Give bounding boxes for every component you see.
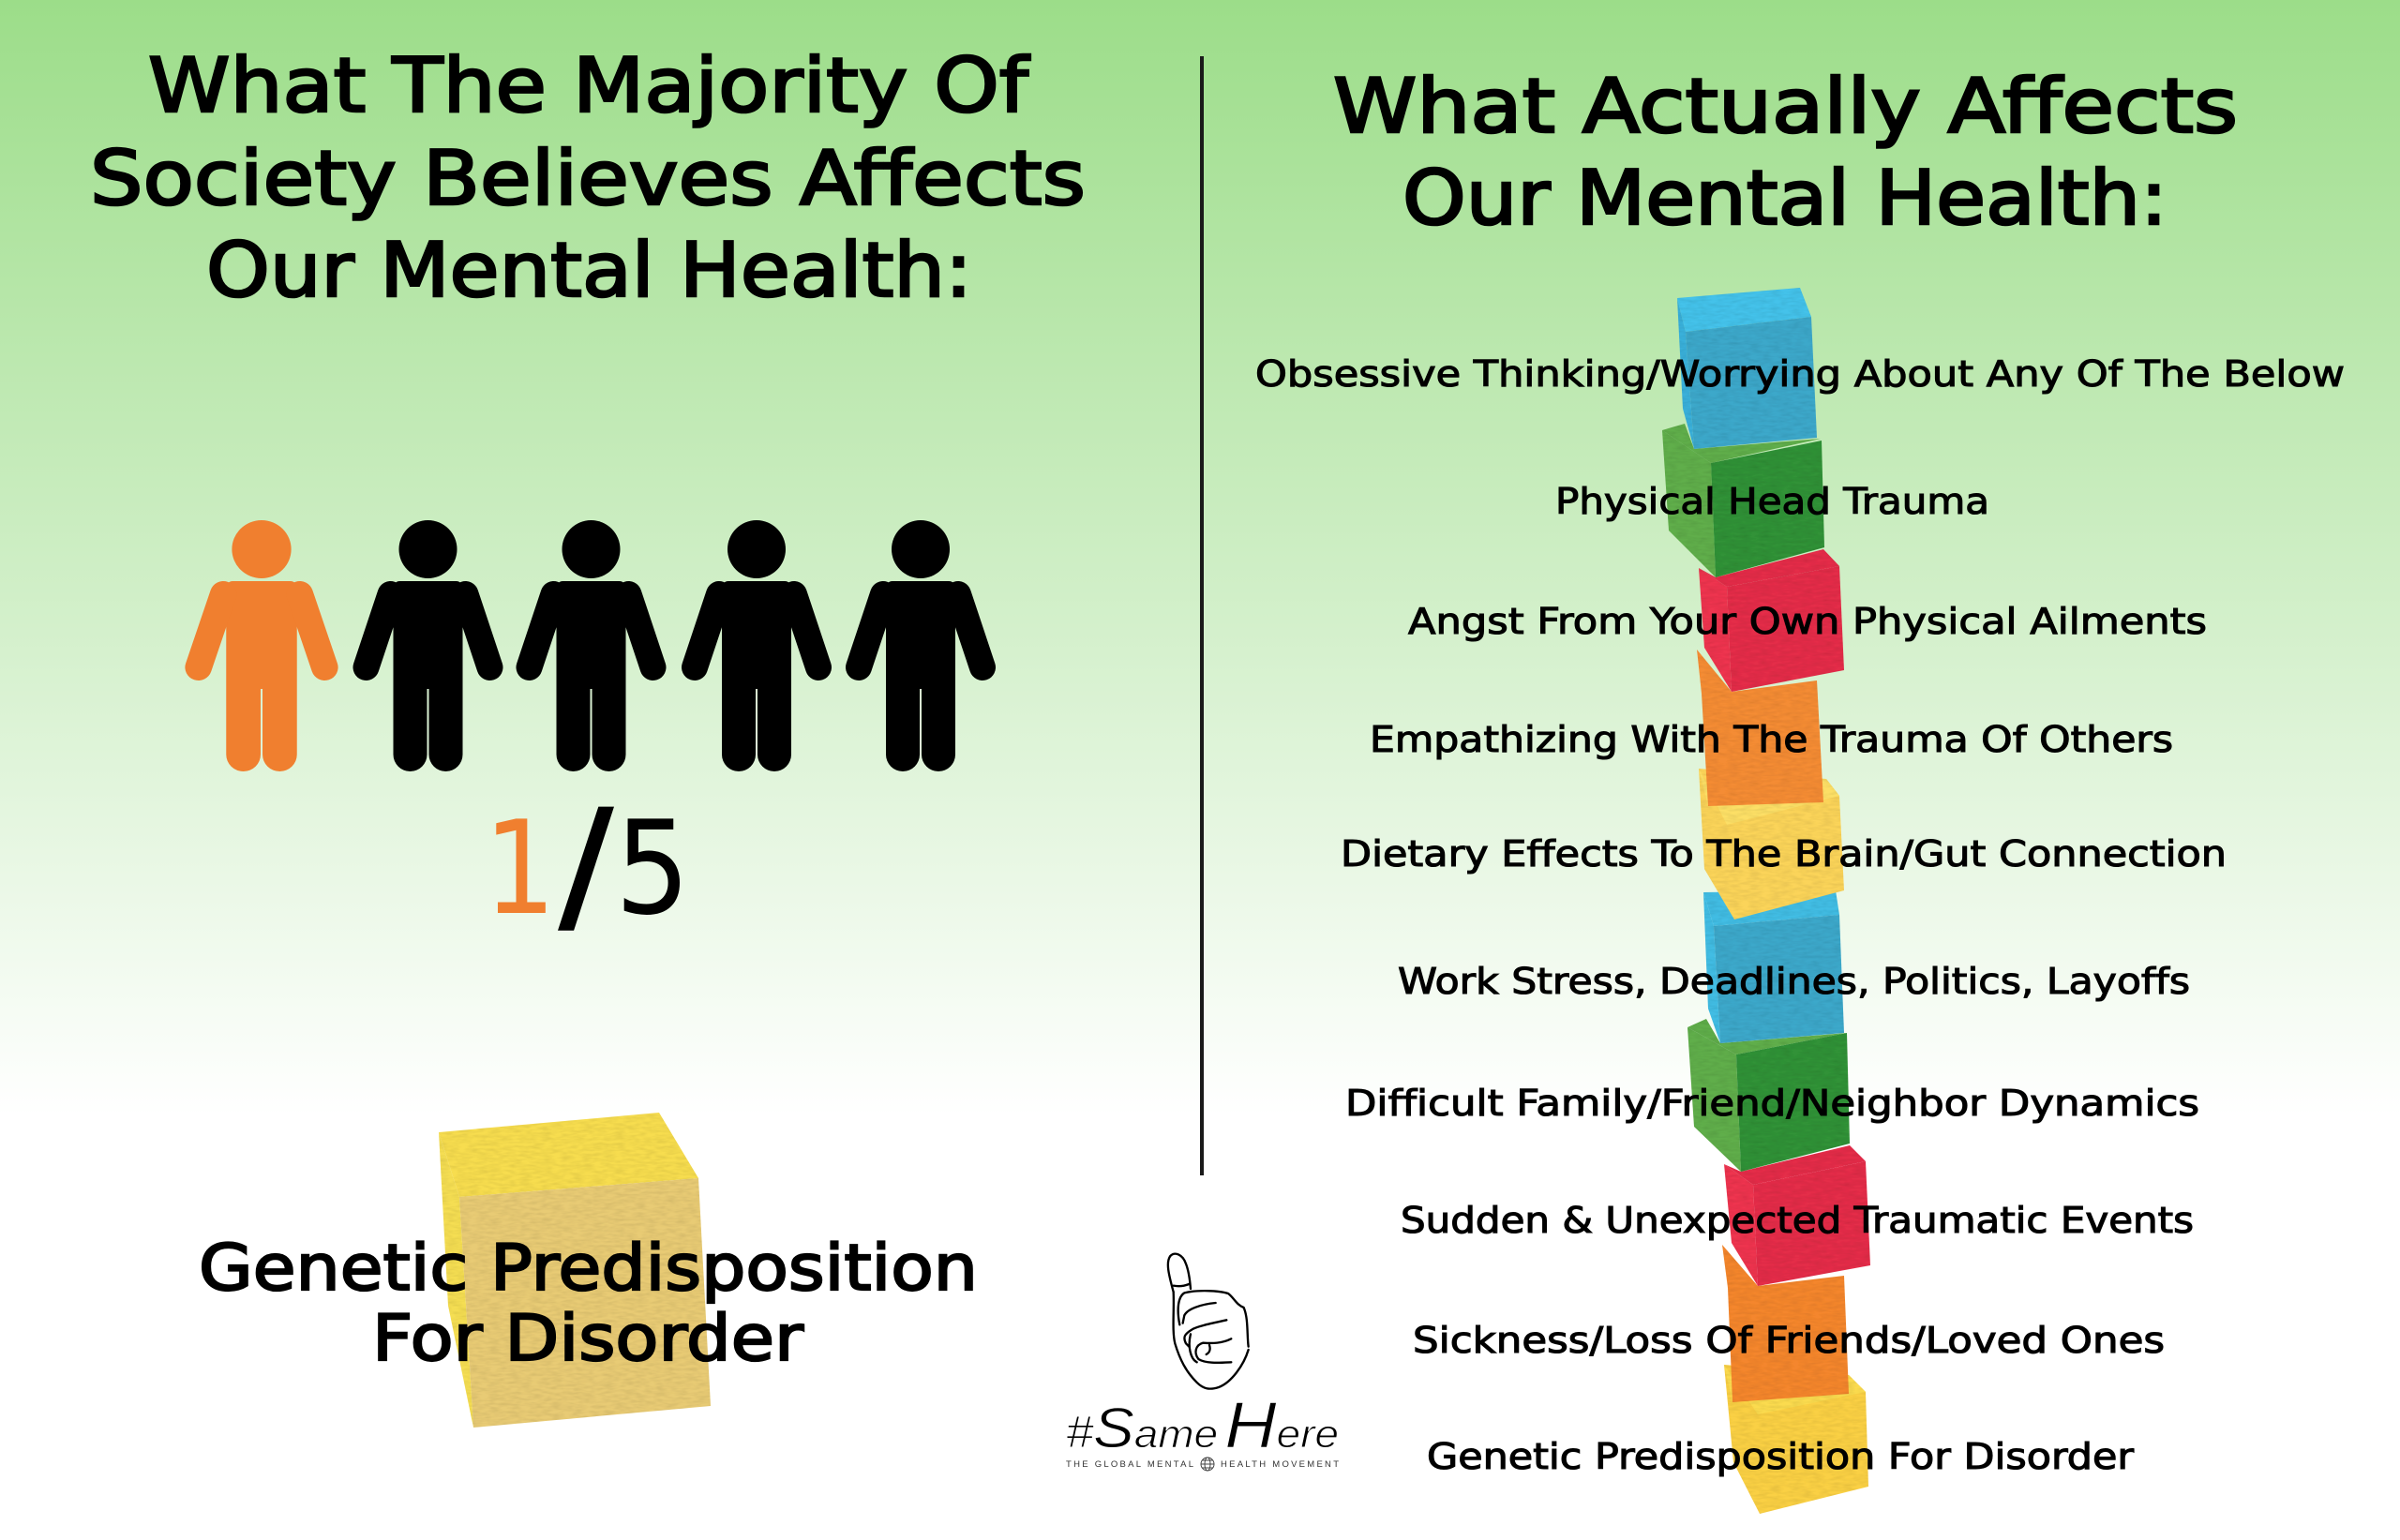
- left block caption: [199, 1232, 978, 1376]
- left heading: [90, 42, 1086, 314]
- block: green upper: [1662, 424, 1824, 577]
- block: orange upper: [1697, 650, 1823, 806]
- left block caption: Genetic Predisposition: [199, 1232, 978, 1306]
- factor: sickness and loss: Sickness/Loss Of Friends/Loved Ones: [1413, 1320, 2165, 1361]
- left heading: Society Believes Affects: [90, 135, 1086, 222]
- pictogram: one in five people: [199, 520, 982, 771]
- icon: black person 2: [366, 520, 489, 771]
- factor: work stress: Work Stress, Deadlines, Politics, Layoffs: [1398, 961, 2190, 1002]
- list of actual factors: [1255, 353, 2345, 1477]
- block: blue lower: [1703, 890, 1844, 1043]
- logo: Same Here thumbs up: [1066, 1254, 1339, 1471]
- factor: traumatic events: Sudden & Unexpected Traumatic Events: [1401, 1200, 2194, 1241]
- fraction 1/5: /: [558, 777, 615, 965]
- block: yellow upper: [1699, 769, 1844, 920]
- logo tagline: HEALTH MOVEMENT: [1221, 1459, 1339, 1470]
- left heading: What The Majority Of: [148, 42, 1030, 129]
- icon: thumbs up hand: [1168, 1254, 1249, 1389]
- block: red lower: [1724, 1145, 1870, 1286]
- factor: empathizing: Empathizing With The Trauma Of Others: [1370, 719, 2173, 760]
- factor: physical ailments: Angst From Your Own Physical Ailments: [1408, 601, 2207, 642]
- factor: dietary effects: Dietary Effects To The Brain/Gut Connection: [1341, 833, 2227, 875]
- left block caption: For Disorder: [372, 1302, 803, 1376]
- background gradient: [0, 0, 2400, 1115]
- vertical divider: [1200, 56, 1204, 1175]
- block: green lower: [1688, 1019, 1850, 1172]
- right heading: [1333, 63, 2238, 242]
- right heading: What Actually Affects: [1333, 63, 2238, 150]
- left heading: Our Mental Health:: [206, 227, 972, 314]
- icon: black person 5: [859, 520, 982, 771]
- factor: family dynamics: Difficult Family/Friend/Neighbor Dynamics: [1345, 1083, 2199, 1124]
- fraction 1/5: 1: [484, 793, 556, 944]
- icon: black person 4: [695, 520, 818, 771]
- fraction 1/5: 5: [615, 793, 690, 944]
- block: yellow bottom: [1724, 1365, 1868, 1514]
- factor: obsessive thinking: Obsessive Thinking/Worrying About Any Of The Below: [1255, 353, 2345, 395]
- icon: orange person: [199, 520, 324, 771]
- factor: genetic predisposition: Genetic Predisposition For Disorder: [1427, 1436, 2134, 1477]
- single yellow block: [439, 1113, 711, 1428]
- logo wordmark: #Same Here: [1066, 1388, 1339, 1461]
- fraction 1/5: [484, 777, 690, 965]
- block: red upper: [1699, 549, 1844, 692]
- icon: globe: [1201, 1458, 1214, 1471]
- tower of blocks: [1662, 288, 1870, 1514]
- block: orange lower: [1722, 1245, 1849, 1402]
- logo tagline: THE GLOBAL MENTAL: [1066, 1459, 1193, 1470]
- logo tagline: [1066, 1459, 1339, 1470]
- block: blue upper: [1677, 288, 1817, 449]
- icon: black person 3: [529, 520, 652, 771]
- factor: head trauma: Physical Head Trauma: [1555, 481, 1989, 522]
- right heading: Our Mental Health:: [1402, 155, 2168, 242]
